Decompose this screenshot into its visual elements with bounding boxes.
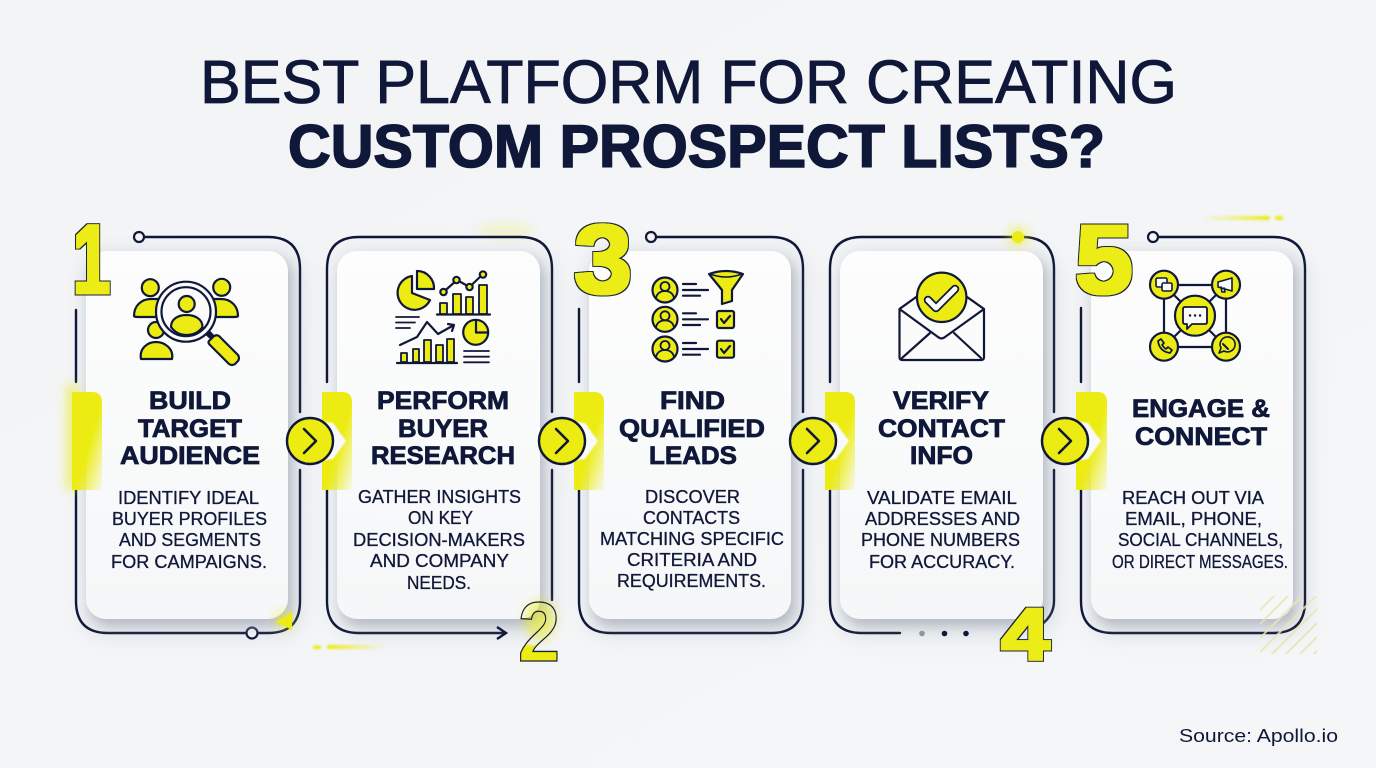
description: DECISION-MAKERS xyxy=(353,530,525,550)
panel: step 5 engage and connect xyxy=(1076,224,1317,654)
description: FOR CAMPAIGNS. xyxy=(111,552,267,572)
heading: TARGET xyxy=(138,415,242,443)
heading: QUALIFIED xyxy=(619,415,765,443)
description: VALIDATE EMAIL xyxy=(867,488,1017,508)
heading xyxy=(878,387,1005,470)
card outline xyxy=(579,237,803,633)
description: BUYER PROFILES xyxy=(112,509,267,529)
arrow 4 to 5 xyxy=(1042,418,1101,464)
description xyxy=(353,487,525,593)
top glow xyxy=(477,224,533,238)
heading xyxy=(120,387,260,470)
glowing dot on outline xyxy=(1008,227,1028,247)
heading: LEADS xyxy=(649,442,737,470)
card xyxy=(337,251,540,619)
title: CUSTOM PROSPECT LISTS? xyxy=(288,113,1105,180)
card xyxy=(1091,251,1293,619)
heading: RESEARCH xyxy=(371,442,515,470)
outline start circle xyxy=(646,232,656,242)
card outline xyxy=(1081,237,1305,633)
card outline xyxy=(327,237,552,633)
dots xyxy=(919,631,969,636)
description: CRITERIA AND xyxy=(627,550,757,570)
outline arrowhead xyxy=(497,627,506,639)
number 2: 2 xyxy=(518,585,560,679)
heading xyxy=(619,387,765,470)
source: Source: Apollo.io xyxy=(1179,725,1338,746)
yellow tab xyxy=(1076,392,1107,490)
panel: step 4 verify contact info xyxy=(825,227,1060,675)
description: AND COMPANY xyxy=(370,551,509,571)
heading: FIND xyxy=(660,387,725,415)
heading xyxy=(1132,395,1270,451)
description: MATCHING SPECIFIC xyxy=(600,529,784,549)
heading: ENGAGE & xyxy=(1132,395,1270,423)
decorative streak bottom xyxy=(313,645,385,649)
heading: PERFORM xyxy=(377,387,509,415)
yellow tab xyxy=(574,392,604,490)
description xyxy=(861,488,1020,572)
title: BEST PLATFORM FOR CREATING xyxy=(200,48,1177,116)
description: FOR ACCURACY. xyxy=(869,552,1015,572)
icon: charts xyxy=(396,271,490,363)
heading: INFO xyxy=(910,442,973,470)
yellow tab xyxy=(66,385,102,490)
description: SOCIAL CHANNELS, xyxy=(1118,530,1283,550)
description: DISCOVER xyxy=(645,487,740,507)
outline start circle xyxy=(134,232,258,638)
description: OR DIRECT MESSAGES. xyxy=(1112,552,1288,572)
card xyxy=(589,251,791,619)
heading: BUILD xyxy=(149,387,231,415)
decorative streak top right xyxy=(1202,216,1283,220)
description: GATHER INSIGHTS xyxy=(358,487,521,507)
title xyxy=(200,48,1177,180)
arrow 3 to 4 xyxy=(790,418,849,464)
description: REQUIREMENTS. xyxy=(617,571,766,591)
outline start circle xyxy=(1148,232,1158,242)
icon: verified envelope xyxy=(900,273,984,360)
yellow corner accent xyxy=(275,611,293,630)
panel: step 3 find qualified leads xyxy=(574,205,809,640)
description: REACH OUT VIA xyxy=(1122,488,1264,508)
description xyxy=(111,488,267,572)
heading xyxy=(371,387,515,470)
panel: step 2 perform buyer research xyxy=(322,224,560,679)
heading: BUYER xyxy=(398,415,488,443)
description: EMAIL, PHONE, xyxy=(1125,509,1262,529)
card outline xyxy=(830,237,1054,633)
number 5: 5 xyxy=(1075,205,1133,314)
card xyxy=(840,251,1043,619)
number 4: 4 xyxy=(1001,595,1050,675)
card xyxy=(86,251,288,619)
icon: filter leads xyxy=(652,271,743,362)
heading: VERIFY xyxy=(893,387,989,415)
yellow tab xyxy=(825,392,855,490)
description xyxy=(600,487,784,591)
icon: audience magnifier xyxy=(134,279,239,365)
card outline xyxy=(76,237,300,633)
description: NEEDS. xyxy=(407,573,471,593)
heading: CONTACT xyxy=(878,415,1005,443)
description: IDENTIFY IDEAL xyxy=(118,488,259,508)
description xyxy=(1112,488,1288,572)
arrow 1 to 2 xyxy=(287,418,346,464)
description: PHONE NUMBERS xyxy=(861,530,1020,550)
yellow tab xyxy=(322,392,352,490)
icon: connected channels xyxy=(1150,271,1240,361)
description: ADDRESSES AND xyxy=(865,509,1020,529)
number 1: 1 xyxy=(73,205,110,314)
panel: step 1 build target audience xyxy=(66,205,306,640)
arrow 2 to 3 xyxy=(539,418,598,464)
number 3: 3 xyxy=(574,205,632,314)
hatch decoration xyxy=(1260,596,1317,654)
heading: CONNECT xyxy=(1135,423,1267,451)
description: ON KEY xyxy=(408,508,473,528)
heading: AUDIENCE xyxy=(120,442,260,470)
description: CONTACTS xyxy=(643,508,740,528)
description: AND SEGMENTS xyxy=(119,530,261,550)
